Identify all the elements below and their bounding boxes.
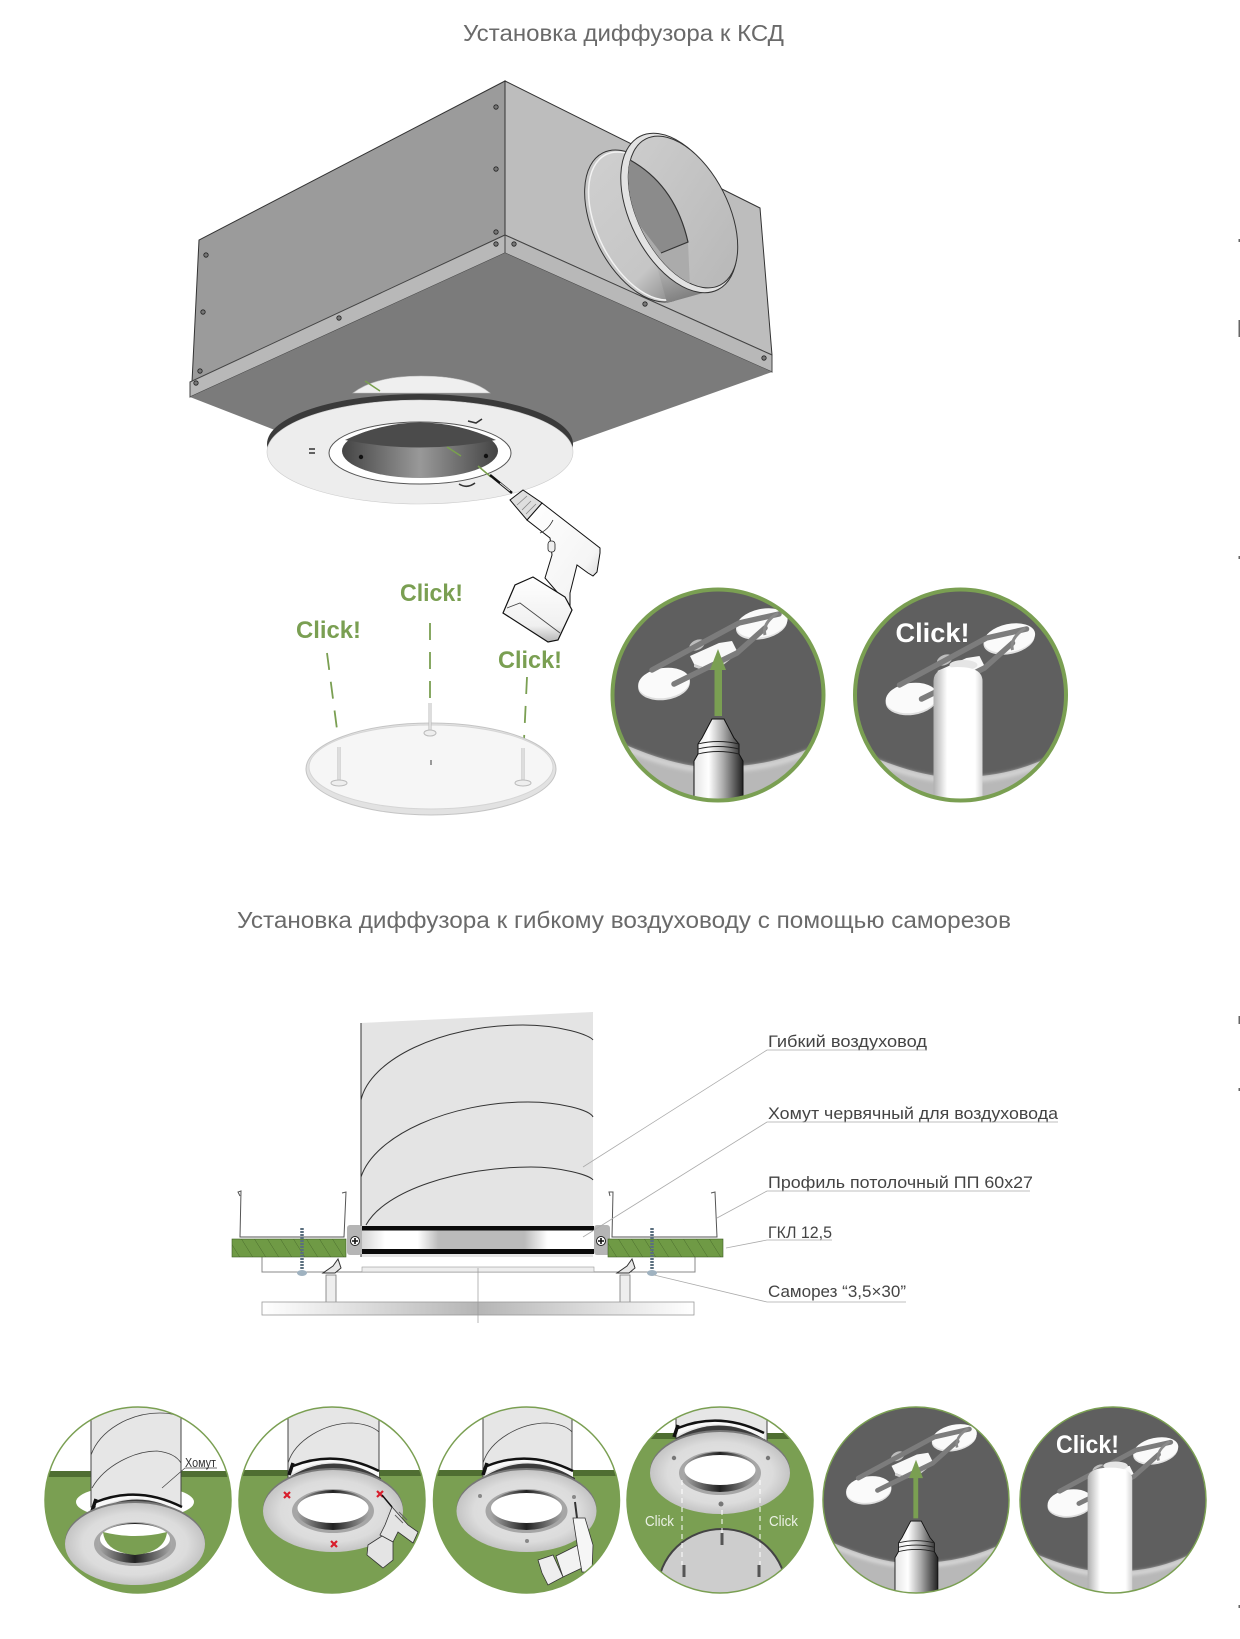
label: plasterboard: ГКЛ 12,5 [768, 1224, 832, 1242]
step circle 6: bracket clicked on pin [1017, 1407, 1209, 1596]
ceiling profiles [238, 1191, 717, 1237]
icon: drill [538, 1502, 593, 1585]
label: ceiling profile: Профиль потолочный ПП 60х27 [768, 1174, 1033, 1192]
lower plate [262, 1257, 695, 1272]
icon: drill [367, 1495, 418, 1568]
label: clamp [162, 1456, 217, 1488]
diffuser disc [262, 1302, 694, 1315]
callout: Click left: Click! [296, 617, 361, 644]
plasterboard [232, 1239, 723, 1257]
wing clips [323, 1259, 635, 1273]
step circle 6: bracket clicked on pin: Click! [1056, 1431, 1119, 1459]
label: worm clamp: Хомут червячный для воздуховода [768, 1105, 1059, 1123]
diffuser stems [326, 1275, 630, 1313]
title: КСД section: Установка диффузора к КСД [463, 20, 784, 46]
label: worm clamp [583, 1105, 1059, 1237]
label: flexible duct [583, 1033, 927, 1167]
box bottom face [190, 253, 772, 492]
step circle 1: clamp fixed [45, 1405, 231, 1601]
flexible duct [361, 1012, 593, 1267]
self-tapping screws [297, 1228, 657, 1276]
step circle 3: drilling holes [434, 1403, 620, 1600]
label: screw [654, 1275, 906, 1302]
worm clamp [347, 1225, 610, 1255]
detail circle: bracket clicked on pin [850, 590, 1070, 805]
icon: cordless drill [490, 475, 600, 642]
step circle 5: bracket with pin approaching [820, 1407, 1012, 1596]
dashed guide lines [327, 623, 527, 740]
box screw holes [194, 105, 766, 385]
illustration: diffuser disc with pins [306, 703, 556, 815]
red marks [284, 1491, 383, 1547]
diffuser ring [267, 394, 573, 504]
step circle 2: drilling marks [239, 1403, 425, 1600]
round duct spigot [584, 132, 738, 303]
label: plasterboard [726, 1224, 832, 1248]
callout: Click right: Click! [498, 647, 562, 674]
label: flexible duct: Гибкий воздуховод [768, 1033, 927, 1051]
detail circle: bracket with pin approaching [608, 590, 828, 805]
green guide lines [365, 381, 491, 477]
label: clamp: Хомут [185, 1456, 216, 1470]
callout: Click centre: Click! [400, 580, 463, 607]
axis line [477, 1268, 479, 1323]
label: click right: Click [769, 1514, 799, 1530]
diagram: section through ceiling with flexible duct [232, 1012, 723, 1323]
label: ceiling profile [717, 1174, 1033, 1218]
detail circle: bracket clicked on pin: Click! [896, 618, 970, 648]
label: screw: Саморез “3,5×30” [768, 1283, 906, 1301]
cropped edge marks [1238, 239, 1240, 1608]
box left face [192, 81, 505, 382]
illustration: plenum box with diffuser ring [190, 81, 772, 504]
diffuser collar dome [353, 376, 490, 393]
step circle 4: fitting the disc [626, 1406, 814, 1594]
box right face [505, 81, 772, 355]
title: flexible duct section: Установка диффузора к гибкому воздуховоду с помощью саморезов [237, 907, 1011, 933]
label: click left: Click [645, 1514, 675, 1530]
box flanges [190, 235, 772, 397]
